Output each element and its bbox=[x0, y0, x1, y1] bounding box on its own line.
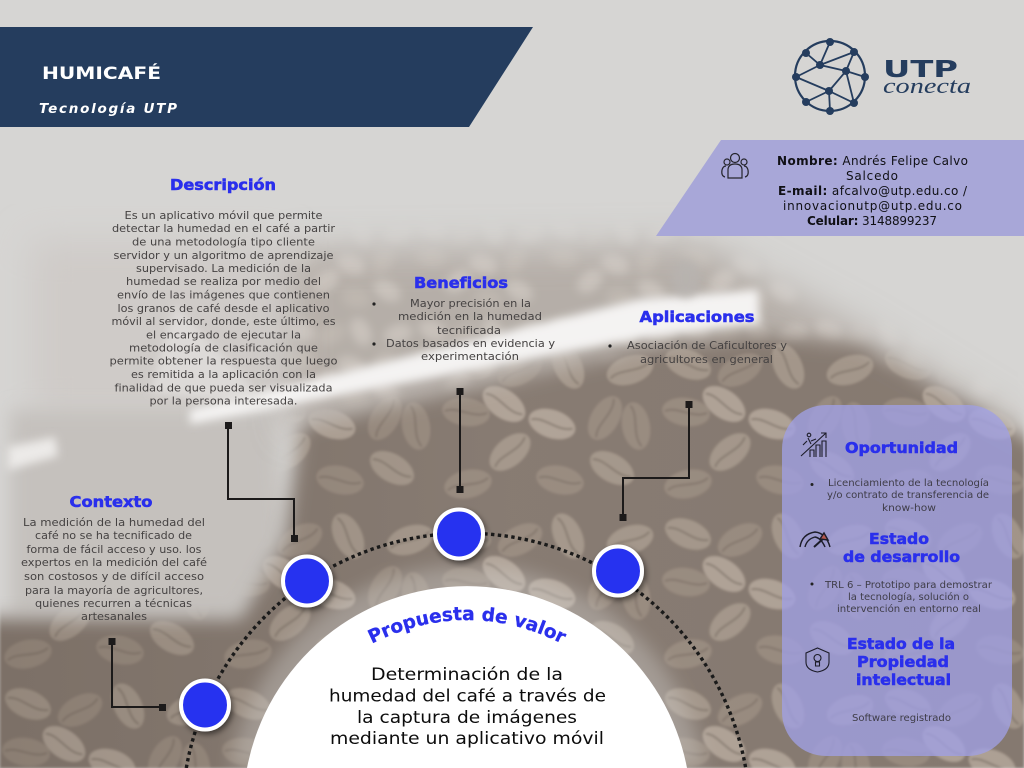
text: estado de desarrollo: intervención en entorno real bbox=[837, 603, 981, 615]
text: value proposition: mediante un aplicativo móvil bbox=[330, 729, 604, 748]
text: description: supervisado. La medición de la bbox=[136, 263, 311, 275]
title: HUMICAFÉ bbox=[42, 62, 161, 84]
text: estado de desarrollo bbox=[810, 580, 993, 615]
heading: Oportunidad: Oportunidad bbox=[845, 439, 958, 457]
text: applications list: agricultores en general bbox=[640, 354, 773, 366]
text: description: de una metodología tipo cliente bbox=[132, 236, 315, 248]
text: value proposition bbox=[329, 665, 606, 748]
text: description: Es un aplicativo móvil que permite bbox=[124, 210, 322, 222]
text: oportunidad bbox=[810, 477, 989, 514]
text: context: La medición de la humedad del bbox=[23, 517, 205, 529]
text: description: servidor y un algoritmo de aprendizaje bbox=[114, 250, 334, 262]
panel: right info bbox=[782, 405, 1012, 756]
text: value proposition: Determinación de la bbox=[371, 665, 563, 684]
heading: Contexto: Contexto bbox=[70, 493, 152, 511]
halo behind value proposition bbox=[230, 566, 704, 768]
text: software registrado: Software registrado bbox=[852, 713, 951, 724]
text: estado de desarrollo: la tecnología, solución o bbox=[848, 591, 969, 603]
logo: UTP conecta: conecta bbox=[883, 73, 971, 98]
heading: Estado de la Propiedad intelectual: intelectual bbox=[856, 671, 951, 689]
text: description: metodología de clasificación que bbox=[129, 342, 318, 354]
connector: Descripción bbox=[225, 422, 298, 542]
text: description: detectar la humedad en el café a partir bbox=[112, 223, 336, 235]
contact text: innovacionutp@utp.edu.co bbox=[783, 199, 962, 213]
connector: Contexto bbox=[108, 638, 166, 711]
text: oportunidad: Licenciamiento de la tecnología bbox=[828, 477, 989, 489]
text: context bbox=[21, 517, 207, 623]
text: benefits list: experimentación bbox=[421, 351, 519, 363]
text: description: los granos de café desde el aplicativo bbox=[118, 303, 330, 315]
heading: Estado de la Propiedad intelectual bbox=[847, 635, 955, 689]
text: value proposition: humedad del café a través de bbox=[329, 686, 606, 706]
icon: shield with bulb bbox=[806, 648, 829, 672]
icon: gauge bbox=[800, 532, 830, 547]
connector: Beneficios bbox=[456, 388, 464, 493]
contact text: E-mail: afcalvo@utp.edu.co / bbox=[778, 184, 968, 198]
text: applications list: Asociación de Caficultores y bbox=[627, 340, 787, 352]
text: benefits list bbox=[372, 298, 555, 363]
icon: growth bbox=[801, 433, 826, 457]
text: oportunidad: know-how bbox=[882, 503, 936, 514]
text: context: son costosos y de difícil acceso bbox=[24, 571, 204, 583]
heading: Descripción: Descripción bbox=[170, 176, 276, 194]
heading: Aplicaciones: Aplicaciones bbox=[640, 308, 755, 326]
subtitle: Tecnología UTP bbox=[39, 101, 177, 117]
text: context: café no se ha tecnificado de bbox=[35, 530, 192, 542]
text: benefits list: Mayor precisión en la bbox=[410, 298, 531, 310]
heading: Propuesta de valor: Propuesta de valor bbox=[367, 607, 567, 644]
heading: Beneficios: Beneficios bbox=[414, 274, 508, 292]
heading: Estado de desarrollo: Estado bbox=[869, 530, 929, 548]
text: context: quienes recurren a técnicas bbox=[35, 598, 192, 610]
text: description: es remitida a la aplicación con la bbox=[131, 369, 316, 381]
text: description bbox=[110, 210, 338, 408]
connector: Aplicaciones bbox=[620, 401, 692, 521]
text: context: forma de fácil acceso y uso. los bbox=[26, 544, 202, 556]
text: benefits list: tecnificada bbox=[437, 325, 501, 337]
text: description: envío de las imágenes que contienen bbox=[117, 290, 330, 302]
text: description: permite obtener la respuesta que luego bbox=[110, 356, 338, 368]
heading: Estado de la Propiedad intelectual: Estado de la bbox=[847, 635, 955, 653]
text: description: por la persona interesada. bbox=[150, 396, 298, 408]
heading: Estado de desarrollo: de desarrollo bbox=[843, 548, 960, 566]
text: context: artesanales bbox=[81, 611, 147, 623]
nodes bbox=[181, 510, 642, 730]
text: context: para la mayoría de agricultores, bbox=[25, 585, 203, 597]
heading: Estado de desarrollo bbox=[843, 530, 960, 566]
panel: value proposition bbox=[247, 586, 687, 768]
contact text: Salcedo bbox=[846, 169, 898, 183]
heading: Estado de la Propiedad intelectual: Propiedad bbox=[857, 653, 949, 671]
contact text: Celular: 3148899237 bbox=[807, 214, 937, 228]
contact text: Nombre: Andrés Felipe Calvo bbox=[777, 154, 968, 168]
header banner bbox=[0, 27, 533, 127]
text: estado de desarrollo: TRL 6 – Prototipo para demostrar bbox=[824, 580, 993, 591]
text: oportunidad: y/o contrato de transferencia de bbox=[827, 490, 989, 501]
icon: people bbox=[722, 154, 748, 178]
background: coffee beans photo bbox=[0, 232, 1024, 768]
text: benefits list: medición en la humedad bbox=[398, 311, 542, 323]
text: description: el encargado de ejecutar la bbox=[146, 330, 301, 342]
dotted arc bbox=[186, 533, 746, 768]
panel: contact bbox=[656, 140, 1024, 236]
text: applications list bbox=[608, 340, 787, 366]
text: context: expertos en la medición del café bbox=[21, 557, 207, 569]
text: value proposition: la captura de imágenes bbox=[357, 708, 577, 727]
text: description: humedad se realiza por medio del bbox=[126, 276, 321, 288]
contact text bbox=[777, 154, 968, 228]
logo: UTP conecta: UTP bbox=[883, 57, 958, 83]
text: benefits list: Datos basados en evidencia y bbox=[386, 338, 555, 350]
text: description: finalidad de que pueda ser visualizada bbox=[114, 382, 332, 394]
text: description: móvil al servidor, donde, este último, es bbox=[112, 316, 336, 328]
logo: UTP conecta bbox=[792, 38, 971, 115]
